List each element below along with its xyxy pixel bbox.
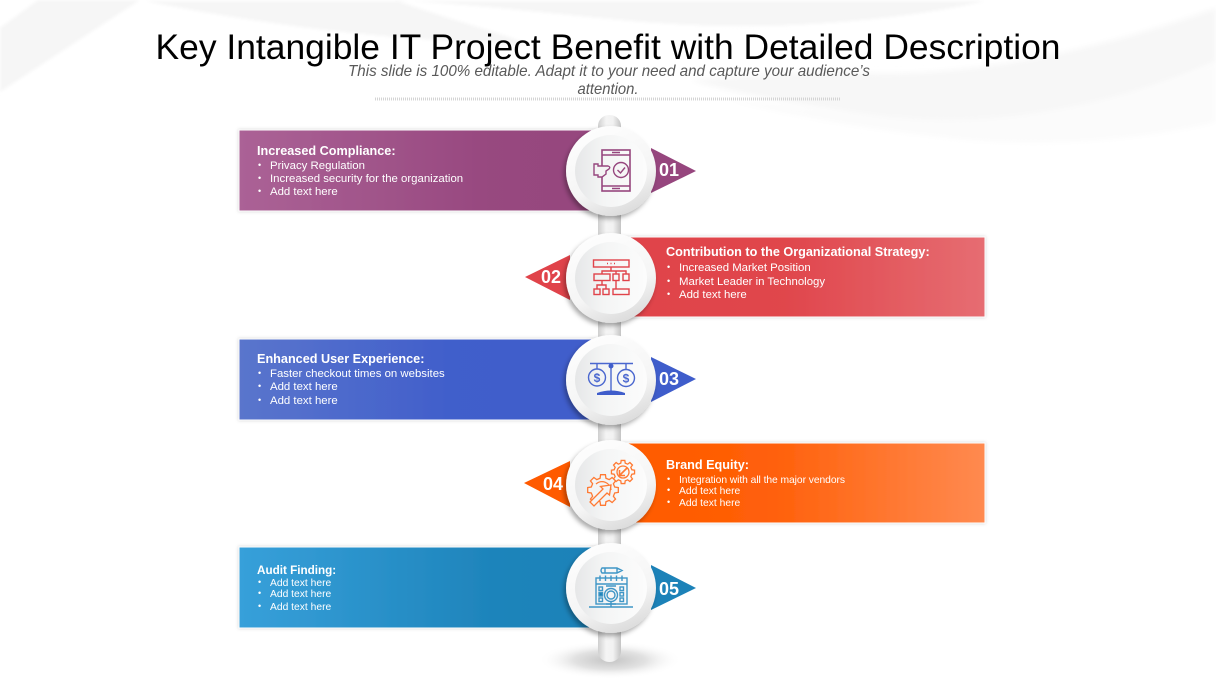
arrow 3: 03 <box>659 369 679 389</box>
banner 5 <box>239 547 601 628</box>
arrow 4: 04 <box>543 474 563 494</box>
arrow 1: 01 <box>659 160 679 180</box>
node 2 <box>566 233 656 323</box>
text 1: Increased Compliance: <box>257 144 396 158</box>
text 2: Contribution to the Organizational Strategy: <box>666 245 930 259</box>
floor shadow <box>538 641 682 679</box>
text 1 <box>257 144 463 198</box>
node 1 <box>566 126 656 216</box>
step 5 <box>239 543 696 633</box>
icon: calendar audit with pencil <box>589 568 633 607</box>
banner 1 <box>239 130 601 211</box>
text 2: • <box>667 276 670 286</box>
text 5: • <box>258 601 261 611</box>
text 2: Add text here <box>679 289 747 301</box>
arrow 5: 05 <box>659 579 679 599</box>
banner 3 <box>239 339 601 420</box>
text 5: Add text here <box>270 578 332 589</box>
text 4: Brand Equity: <box>666 458 749 472</box>
text 5: • <box>258 588 261 598</box>
subtitle: attention. <box>578 81 638 98</box>
banner 4 <box>620 443 985 523</box>
text 5: Add text here <box>270 602 332 613</box>
text 1: Add text here <box>270 186 338 198</box>
text 2: • <box>667 262 670 272</box>
central pole <box>598 115 621 662</box>
node 5 <box>566 543 656 633</box>
arrow 1 <box>651 148 696 193</box>
text 5: Add text here <box>270 589 332 600</box>
arrow 4 <box>524 461 570 507</box>
text 3: • <box>258 368 261 378</box>
node 4 <box>566 440 656 530</box>
arrow 5 <box>651 565 696 610</box>
text 2: Increased Market Position <box>679 262 811 274</box>
icon: balance scale with coins: $ <box>623 372 630 386</box>
text 4: Add text here <box>679 486 741 497</box>
step 3 <box>239 335 696 425</box>
text 3: • <box>258 395 261 405</box>
step 4 <box>524 440 985 530</box>
node 3 <box>566 335 656 425</box>
text 1: • <box>258 186 261 196</box>
text 3: Add text here <box>270 395 338 407</box>
text 5: Audit Finding: <box>257 564 336 577</box>
text 4: Add text here <box>679 498 741 509</box>
text 1: • <box>258 160 261 170</box>
text 4: • <box>667 497 670 507</box>
text 1: • <box>258 173 261 183</box>
subtitle <box>348 63 870 98</box>
icon: phone with hand and check <box>594 150 630 191</box>
text 4: • <box>667 485 670 495</box>
arrow 2: 02 <box>541 267 561 287</box>
text 5 <box>257 564 336 613</box>
text 1: Privacy Regulation <box>270 160 365 172</box>
text 4: Integration with all the major vendors <box>679 475 845 486</box>
arrow 2 <box>525 255 570 300</box>
text 3: • <box>258 381 261 391</box>
arrow 3 <box>651 357 696 402</box>
icon: balance scale with coins <box>588 364 634 395</box>
banner 2 <box>620 237 985 317</box>
subtitle: This slide is 100% editable. Adapt it to your need and capture your audience’s <box>348 63 870 80</box>
text 3 <box>257 352 445 407</box>
text 4 <box>666 458 845 509</box>
text 3: Faster checkout times on websites <box>270 368 445 380</box>
text 4: • <box>667 474 670 484</box>
text 2: Market Leader in Technology <box>679 276 825 288</box>
step 1 <box>239 126 696 216</box>
icon: flow chart <box>594 260 629 294</box>
icon: balance scale with coins: $ <box>594 371 601 385</box>
text 2: • <box>667 289 670 299</box>
icon: gears <box>588 460 635 506</box>
text 1: Increased security for the organization <box>270 173 463 185</box>
title: Key Intangible IT Project Benefit with Detailed Description <box>156 27 1060 67</box>
text 3: Add text here <box>270 381 338 393</box>
text 5: • <box>258 577 261 587</box>
step 2 <box>525 233 985 323</box>
text 2 <box>666 245 930 301</box>
text 3: Enhanced User Experience: <box>257 352 424 366</box>
